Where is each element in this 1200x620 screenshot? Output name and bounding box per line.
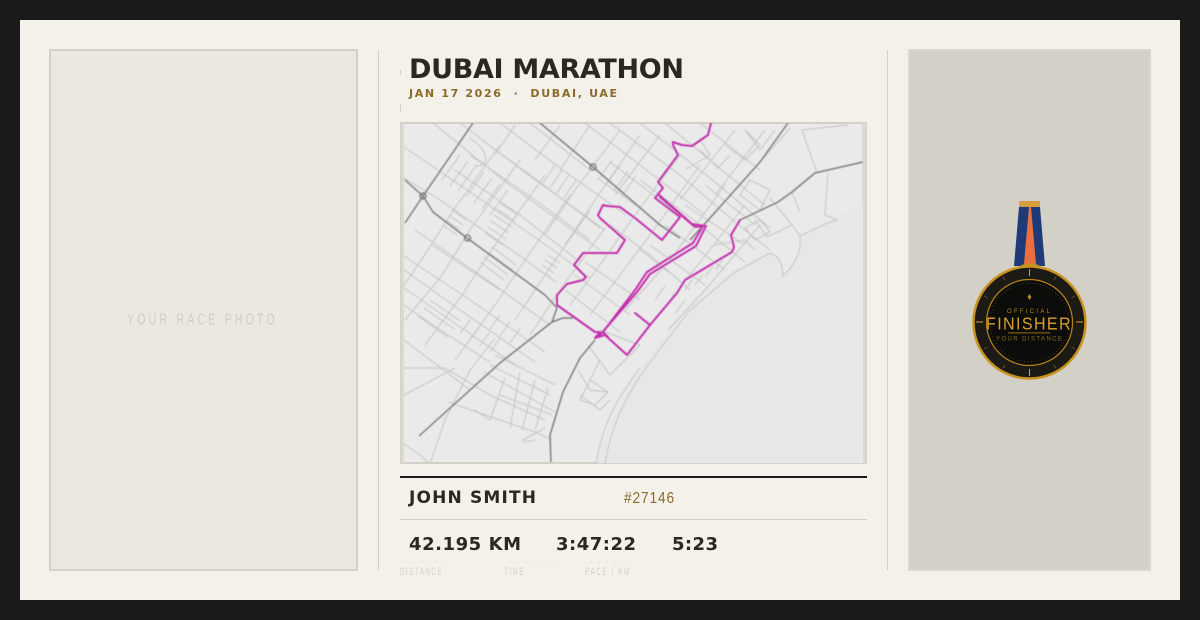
roundabouts <box>420 164 596 241</box>
bib number: #27146 <box>624 490 675 507</box>
stat: time: TIME <box>504 566 525 578</box>
route map <box>401 123 866 464</box>
stat: time: 3:47:22 <box>556 534 636 555</box>
stat: distance: DISTANCE <box>400 566 443 578</box>
heading block <box>400 54 684 112</box>
panel: medal <box>909 50 1150 570</box>
primary roads <box>405 123 863 462</box>
medal disc: YOUR DISTANCE <box>996 336 1062 342</box>
photo placeholder label: YOUR RACE PHOTO <box>127 312 278 328</box>
stat: pace: 5:23 <box>672 534 718 555</box>
stat: distance <box>400 534 521 578</box>
medal disc <box>974 266 1086 378</box>
stat: time <box>504 534 636 578</box>
title: DUBAI MARATHON <box>409 54 684 85</box>
stat: distance: 42.195 KM <box>409 534 521 555</box>
minor streets <box>404 123 848 464</box>
ribbon <box>1014 201 1045 266</box>
marathon route <box>557 123 740 355</box>
stat: pace: PACE / KM <box>585 566 631 578</box>
stat: pace <box>585 534 718 578</box>
panel: race photo placeholder <box>50 50 357 570</box>
race date and location: JAN 17 2026 · DUBAI, UAE <box>408 87 617 100</box>
water area <box>597 200 864 464</box>
race stats <box>400 534 718 578</box>
runner band <box>400 476 867 520</box>
medal disc: FINISHER <box>986 314 1072 334</box>
icon: finisher medal <box>974 201 1086 378</box>
runner name: JOHN SMITH <box>408 488 536 508</box>
medal disc: OFFICIAL <box>1007 309 1051 315</box>
